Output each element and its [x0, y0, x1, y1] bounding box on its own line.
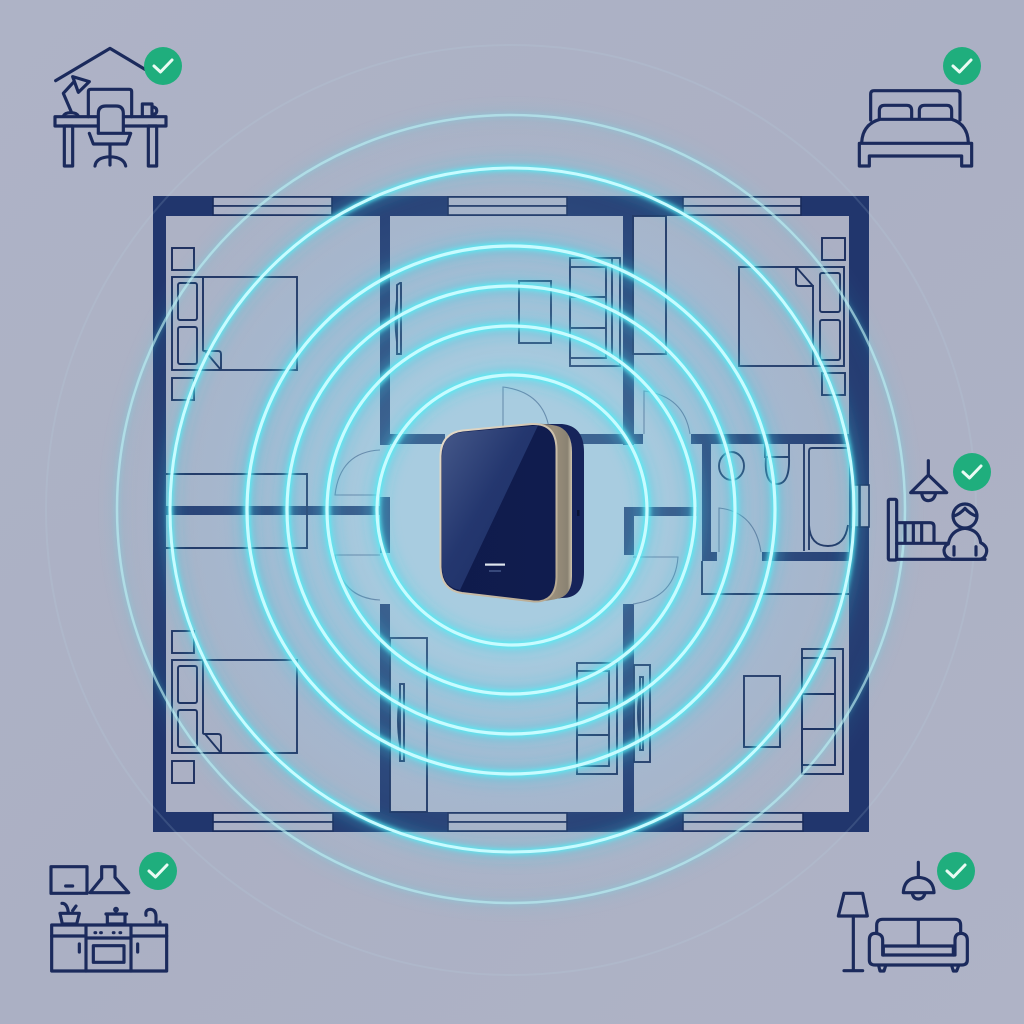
device face — [440, 424, 556, 602]
bottom-centre room furniture — [390, 638, 617, 812]
badge: kitchen check — [139, 852, 177, 890]
top-right bedroom furniture — [633, 216, 845, 395]
glossy reflection — [442, 426, 538, 590]
bottom-left bedroom furniture — [172, 631, 297, 783]
windows — [213, 197, 869, 831]
badge: home office check — [144, 47, 182, 85]
top-left bedroom furniture — [172, 248, 297, 400]
icon: living room — [838, 862, 967, 971]
outer and interior walls — [153, 196, 869, 832]
floor plan — [153, 196, 869, 832]
bathroom fixtures — [702, 444, 849, 594]
badge: living room check — [937, 852, 975, 890]
icon: home office — [55, 48, 166, 166]
floor tint under plan — [92, 90, 932, 930]
ring halo — [117, 115, 905, 903]
ring glow — [117, 115, 905, 903]
side port — [577, 510, 580, 516]
icon: kitchen — [51, 867, 167, 971]
metal band — [535, 424, 572, 602]
closet outline on left — [166, 474, 307, 548]
icon: bedroom — [859, 91, 972, 166]
device back shell — [535, 424, 584, 601]
badge: bedroom check — [943, 47, 981, 85]
status light — [485, 564, 505, 572]
icon: children's room — [888, 461, 987, 560]
badge: children's room check — [953, 453, 991, 491]
central signal glow — [92, 90, 932, 930]
top-centre living room furniture — [396, 258, 620, 366]
door swings — [335, 387, 761, 604]
router device — [440, 424, 584, 602]
bottom-right room furniture — [634, 649, 843, 774]
